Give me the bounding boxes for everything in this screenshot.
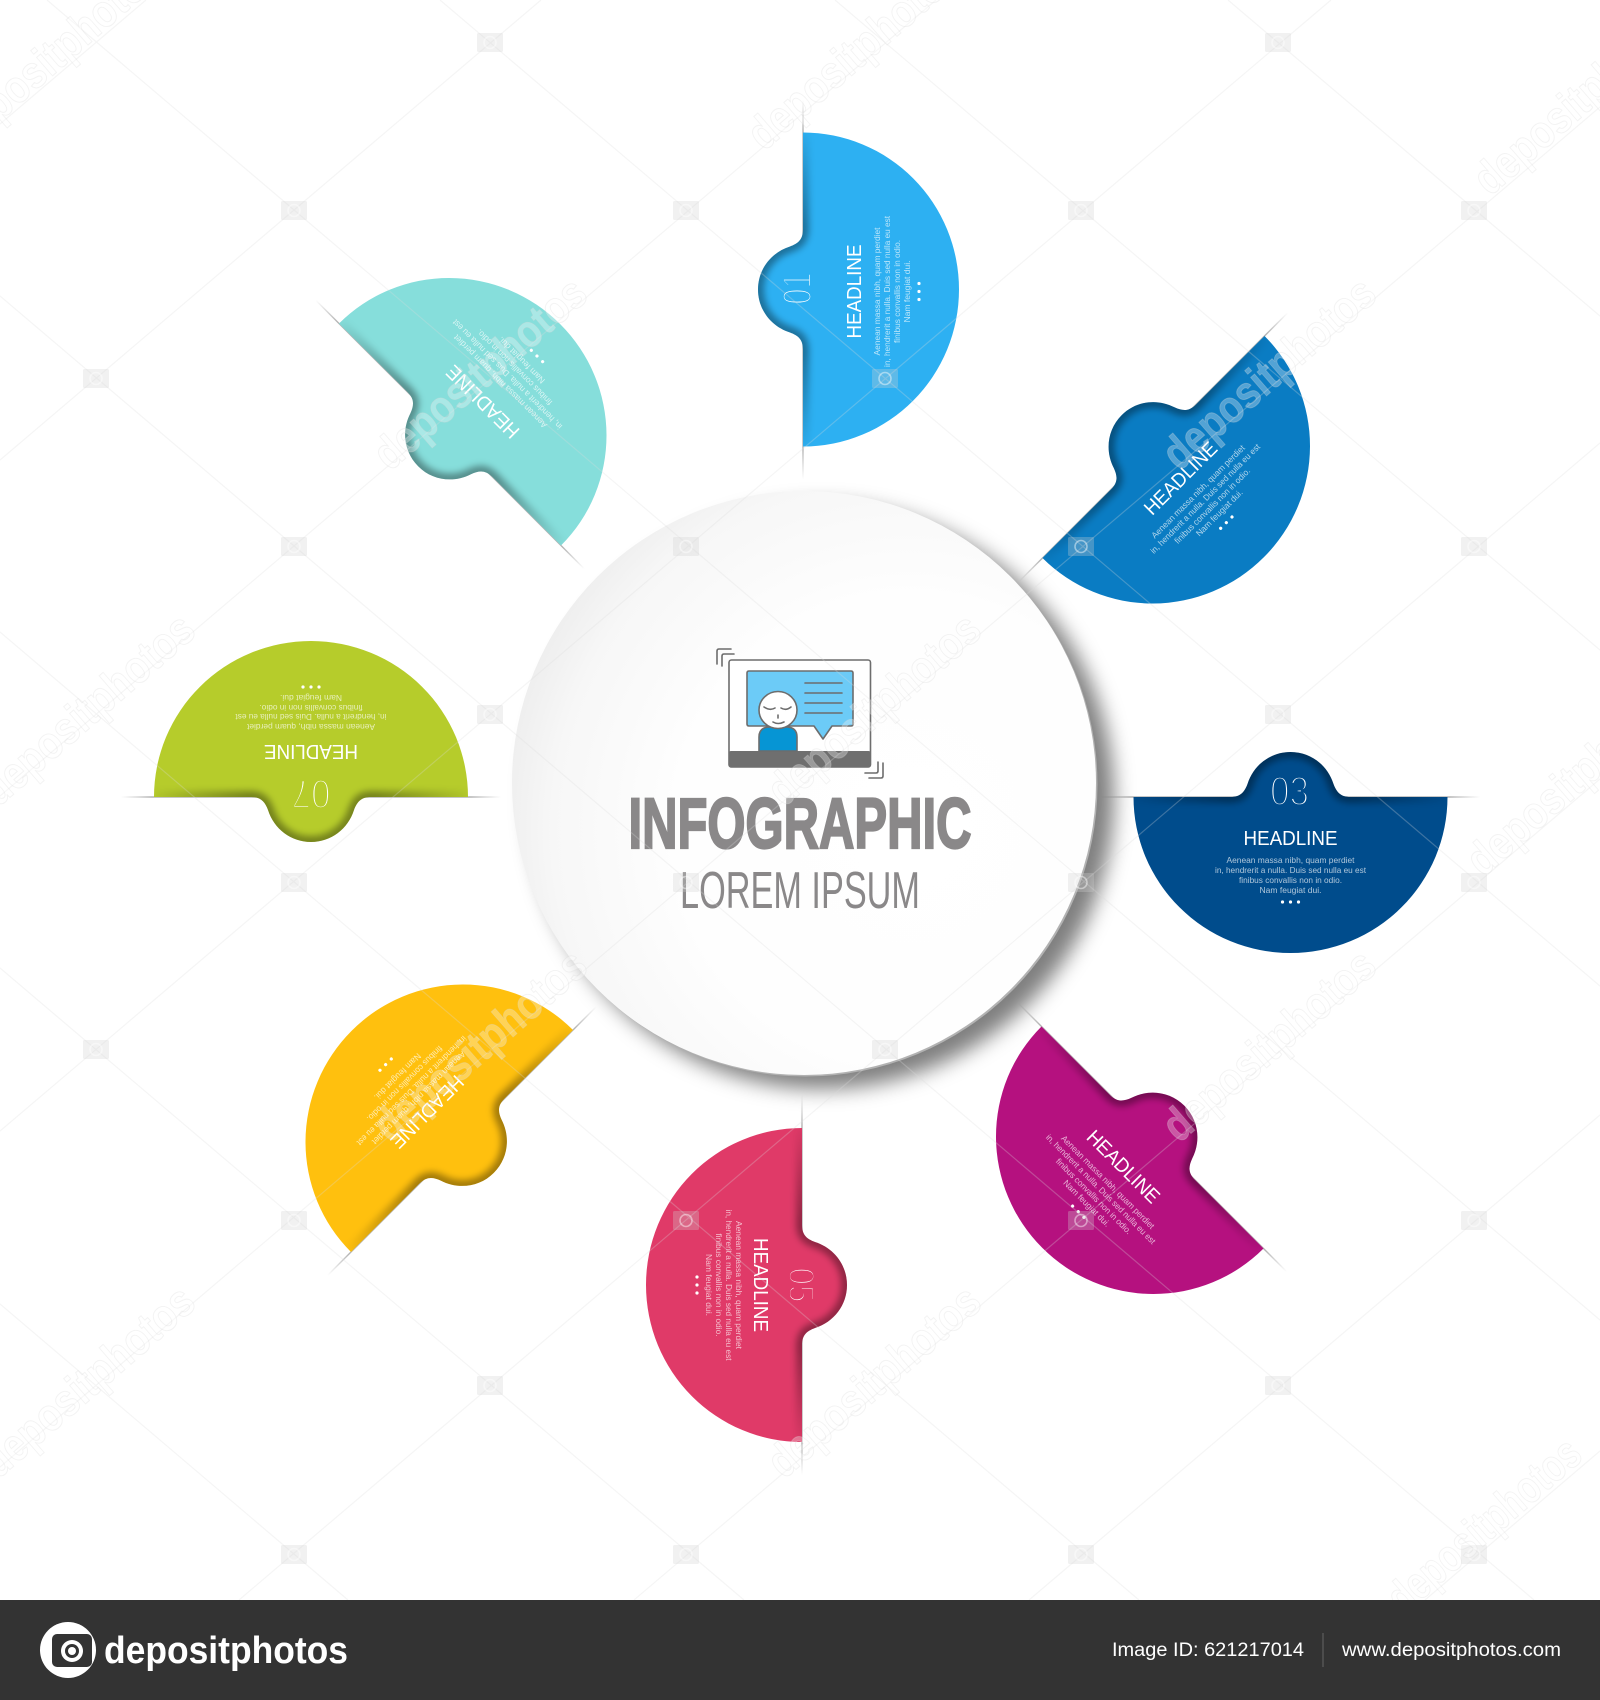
panel: step 02 (1022, 315, 1310, 604)
number 07: 07 (292, 771, 330, 817)
body text 03 (1215, 855, 1367, 895)
body text 06: finibus convallis non in odio. (365, 1044, 445, 1124)
body text 08: Aenean massa nibh, quam perdiet (451, 332, 549, 430)
logo wordmark: depositphotos (104, 1630, 348, 1672)
body text 01: Aenean massa nibh, quam perdiet (872, 227, 882, 356)
watermark: depositphotos text: depositphotos (362, 938, 597, 1151)
subtitle: LOREM IPSUM: LOREM IPSUM (680, 862, 920, 920)
body text 07: finibus convallis non in odio. (260, 703, 362, 713)
body text 03: Nam feugiat dui. (1260, 885, 1322, 895)
body text 08: in, hendrerit a nulla. Duis sed nulla eu est (450, 317, 564, 431)
dots 02 (1218, 515, 1234, 531)
central circle (512, 491, 1114, 1089)
body text 05: Aenean massa nibh, quam perdiet (734, 1221, 744, 1350)
dots 03 (1281, 900, 1300, 904)
body text 04: finibus convallis non in odio. (1054, 1156, 1134, 1236)
dots 07 (301, 685, 321, 689)
body text 03: in, hendrerit a nulla. Duis sed nulla eu est (1215, 865, 1367, 875)
body text 06: Aenean massa nibh, quam perdiet (370, 1049, 468, 1147)
body text 07: in, hendrerit a nulla. Duis sed nulla eu est (235, 712, 386, 722)
body text 07: Nam feugiat dui. (280, 693, 342, 703)
body text 04: Nam feugiat dui. (1061, 1178, 1112, 1229)
body text 06: Nam feugiat dui. (372, 1051, 423, 1102)
body text 01 (872, 215, 912, 367)
dots 06 (378, 1057, 394, 1073)
body text 02: finibus convallis non in odio. (1172, 466, 1252, 546)
watermark: depositphotos text: depositphotos (756, 602, 991, 815)
panel: step 01 (758, 100, 959, 480)
watermark: depositphotos text: depositphotos (1151, 938, 1386, 1151)
body text 04: in, hendrerit a nulla. Duis sed nulla eu est (1044, 1132, 1158, 1246)
headline 02: HEADLINE (1140, 438, 1222, 520)
body text 02: Aenean massa nibh, quam perdiet (1149, 442, 1247, 540)
panel: step 07 (121, 641, 501, 842)
body text 06: in, hendrerit a nulla. Duis sed nulla eu est (354, 1034, 469, 1148)
headline 08: HEADLINE (442, 360, 524, 442)
body text 01: Nam feugiat dui. (902, 260, 912, 322)
watermark: depositphotos text: depositphotos (362, 266, 597, 479)
body text 05: Nam feugiat dui. (704, 1254, 714, 1316)
body text 03: Aenean massa nibh, quam perdiet (1226, 855, 1355, 865)
body text 07 (235, 693, 386, 732)
panel: step 04 (996, 1006, 1284, 1294)
footer bar (0, 1600, 1600, 1700)
body text 01: finibus convallis non in odio. (892, 240, 902, 343)
number 05: 05 (781, 1268, 822, 1302)
body text 08: Nam feugiat dui. (496, 335, 547, 386)
body text 07: Aenean massa nibh, quam perdiet (246, 722, 375, 732)
headline 07: HEADLINE (264, 740, 358, 762)
dots 08 (529, 348, 545, 364)
body text 08: finibus convallis non in odio. (474, 327, 554, 407)
body text 03: finibus convallis non in odio. (1239, 875, 1342, 885)
number 01: 01 (774, 272, 820, 304)
watermark: depositphotos text: depositphotos (756, 1274, 991, 1487)
body text 02: in, hendrerit a nulla. Duis sed nulla eu est (1148, 441, 1262, 556)
headline 01: HEADLINE (844, 244, 866, 338)
body text 02: Nam feugiat dui. (1194, 487, 1245, 538)
dots 04 (1070, 1204, 1086, 1220)
headline 06: HEADLINE (386, 1070, 468, 1152)
body text 04: Aenean massa nibh, quam perdiet (1059, 1133, 1157, 1231)
panel: step 05 (646, 1095, 847, 1475)
body text 01: in, hendrerit a nulla. Duis sed nulla eu est (882, 215, 892, 367)
headline 05: HEADLINE (749, 1238, 771, 1332)
image id: Image ID: 621217014 (1112, 1640, 1304, 1661)
panel: step 08 (318, 278, 606, 566)
website url: www.depositphotos.com (1341, 1640, 1561, 1661)
watermark: depositphotos text: depositphotos (1151, 266, 1386, 479)
body text 05 (704, 1210, 744, 1361)
body text 05: in, hendrerit a nulla. Duis sed nulla eu est (724, 1210, 734, 1361)
dots 01 (917, 282, 921, 301)
body text 05: finibus convallis non in odio. (714, 1234, 724, 1336)
icon: depositphotos camera logo (40, 1622, 96, 1678)
number 03: 03 (1270, 768, 1309, 814)
title: INFOGRAPHIC: INFOGRAPHIC (628, 785, 972, 864)
panel: step 03 (1100, 752, 1480, 953)
dots 05 (695, 1275, 699, 1295)
headline 03: HEADLINE (1244, 828, 1338, 850)
headline 04: HEADLINE (1082, 1126, 1164, 1208)
watermark: camera marks (83, 33, 1487, 1564)
icon: presenter screen with speech bubble (717, 649, 883, 778)
panel: step 06 (306, 984, 594, 1273)
